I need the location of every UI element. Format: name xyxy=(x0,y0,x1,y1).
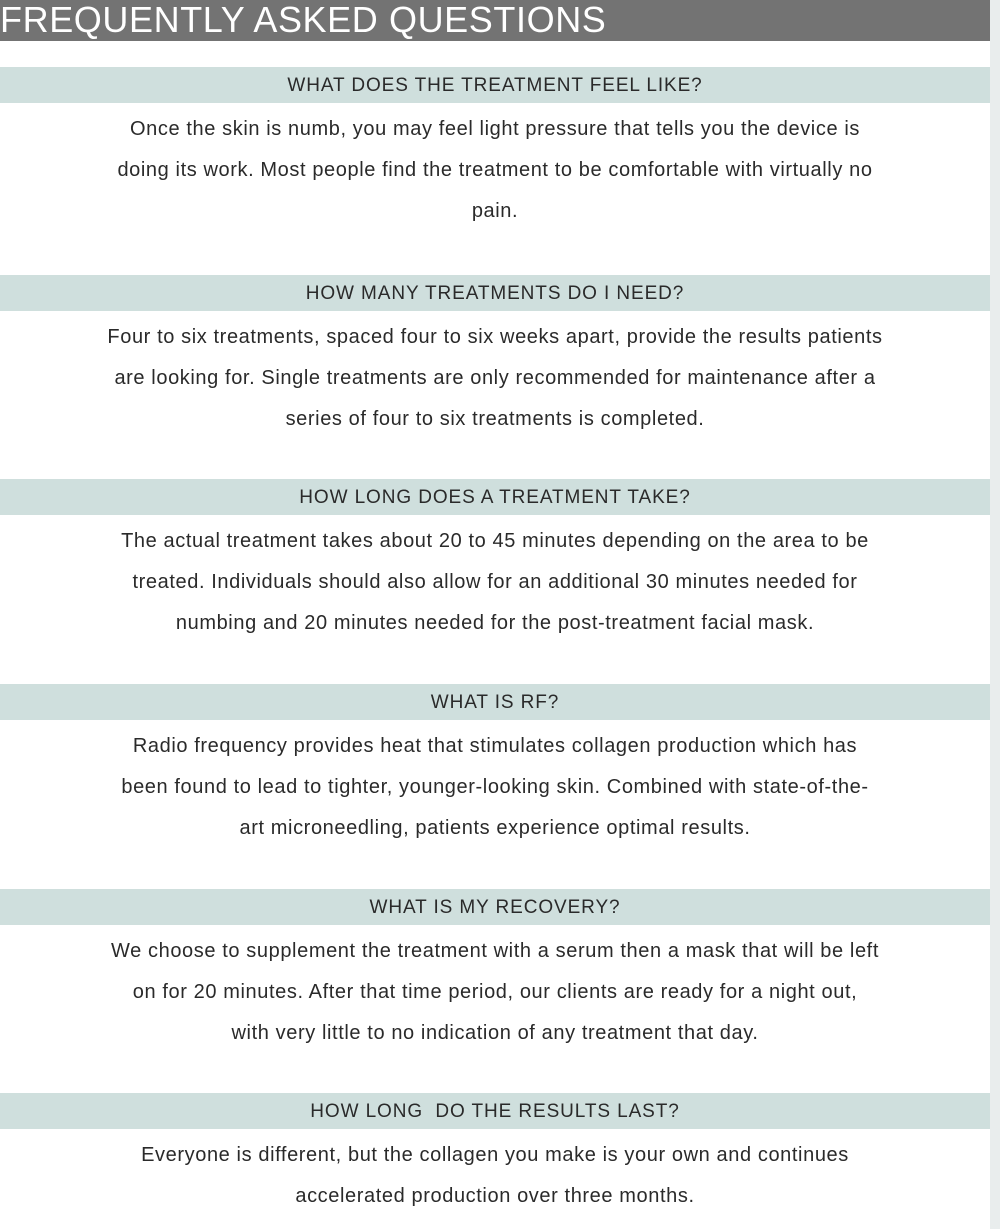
text: results xyxy=(141,1144,849,1207)
text: RF: art microneedling, patients experience optimal results. xyxy=(239,817,751,839)
panel: how many xyxy=(0,275,990,430)
heading: recovery xyxy=(0,889,990,925)
heading: how long xyxy=(0,479,990,515)
text: feel: pain. xyxy=(472,200,518,222)
text: how many xyxy=(107,326,883,430)
text: results: Everyone is different, but the collagen you make is your own and continues xyxy=(141,1144,849,1166)
text: how long xyxy=(121,530,869,634)
title: FREQUENTLY ASKED QUESTIONS xyxy=(0,0,606,40)
panel: feel xyxy=(0,67,990,222)
text: RF: Radio frequency provides heat that stimulates collagen production which has xyxy=(133,735,857,757)
heading: recovery: WHAT IS MY RECOVERY? xyxy=(370,897,620,918)
text: feel: doing its work. Most people find the treatment to be comfortable with virtually no xyxy=(117,159,873,181)
heading: how long: HOW LONG DOES A TREATMENT TAKE? xyxy=(299,487,691,508)
text: recovery: on for 20 minutes. After that time period, our clients are ready for a night out, xyxy=(133,981,857,1003)
heading: feel: WHAT DOES THE TREATMENT FEEL LIKE? xyxy=(287,75,703,96)
heading: results xyxy=(0,1093,990,1129)
heading: how many: HOW MANY TREATMENTS DO I NEED? xyxy=(306,283,684,304)
text: how many: are looking for. Single treatments are only recommended for maintenance after a xyxy=(114,367,876,389)
heading: results: HOW LONG DO THE RESULTS LAST? xyxy=(310,1101,680,1122)
text: RF: been found to lead to tighter, younger-looking skin. Combined with state-of-the- xyxy=(121,776,869,798)
text: feel xyxy=(117,118,873,222)
text: RF xyxy=(121,735,869,839)
heading: feel xyxy=(0,67,990,103)
heading: RF xyxy=(0,684,990,720)
text: recovery: with very little to no indication of any treatment that day. xyxy=(232,1022,758,1044)
text: recovery: We choose to supplement the treatment with a serum then a mask that will be left xyxy=(111,940,879,962)
text: feel: Once the skin is numb, you may feel light pressure that tells you the device is xyxy=(130,118,860,140)
panel: results xyxy=(0,1093,990,1207)
title xyxy=(0,0,990,41)
heading: how many xyxy=(0,275,990,311)
text: how many: series of four to six treatments is completed. xyxy=(286,408,704,430)
text: how long: numbing and 20 minutes needed for the post-treatment facial mask. xyxy=(176,612,814,634)
heading: RF: WHAT IS RF? xyxy=(431,692,559,713)
text: results: accelerated production over three months. xyxy=(295,1185,695,1207)
text: recovery xyxy=(111,940,879,1044)
panel: RF xyxy=(0,684,990,839)
panel: how long xyxy=(0,479,990,634)
text: how long: treated. Individuals should also allow for an additional 30 minutes needed for xyxy=(132,571,858,593)
text: how many: Four to six treatments, spaced four to six weeks apart, provide the results patients xyxy=(107,326,883,348)
panel: recovery xyxy=(0,889,990,1044)
text: how long: The actual treatment takes about 20 to 45 minutes depending on the area to be xyxy=(121,530,869,552)
